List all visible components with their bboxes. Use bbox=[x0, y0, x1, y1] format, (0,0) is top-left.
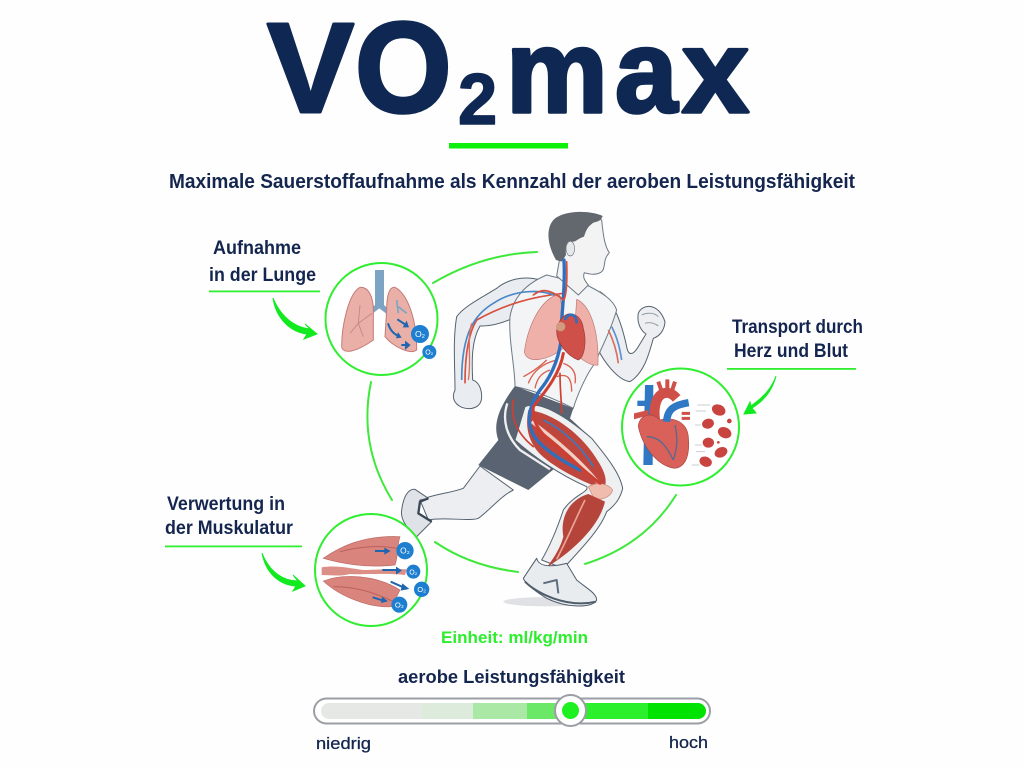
circle: heart bbox=[622, 368, 739, 486]
ground shadow bbox=[503, 597, 590, 606]
ear bbox=[566, 241, 575, 256]
title underline bbox=[449, 143, 568, 148]
scale high label: hoch bbox=[669, 733, 708, 752]
subtitle: Maximale Sauerstoffaufnahme als Kennzahl der aeroben Leistungsfähigkeit bbox=[169, 170, 855, 193]
scale heading: aerobe Leistungsfähigkeit bbox=[398, 667, 625, 687]
circle: lungs: O₂ bbox=[415, 329, 425, 339]
scale bar bbox=[314, 695, 710, 726]
title: 2 bbox=[458, 59, 497, 140]
title: V bbox=[267, 0, 354, 140]
label: muscle: Verwertung in bbox=[167, 494, 285, 515]
torso bbox=[510, 275, 617, 408]
label: lung: Aufnahme bbox=[213, 238, 301, 259]
arrow: muscle bbox=[262, 553, 305, 591]
circle: lungs bbox=[326, 263, 438, 375]
label: muscle: der Muskulatur bbox=[165, 518, 294, 539]
blood cells bbox=[698, 402, 733, 469]
head and neck bbox=[557, 217, 609, 295]
connecting arcs bbox=[367, 252, 676, 572]
title: a bbox=[615, 6, 678, 138]
flow arrows bbox=[388, 319, 409, 345]
title bbox=[267, 0, 749, 140]
calf muscles bbox=[547, 494, 605, 567]
heart body bbox=[638, 415, 689, 468]
rib vessels bbox=[523, 360, 575, 392]
circle: muscle bbox=[315, 514, 429, 626]
scale marker bbox=[555, 695, 586, 726]
lungs bbox=[524, 294, 563, 360]
label: heart bbox=[727, 317, 863, 370]
title: O bbox=[355, 0, 452, 139]
flow arrows bbox=[373, 551, 403, 601]
right lung bbox=[385, 287, 417, 351]
label: heart: Transport durch bbox=[732, 317, 863, 338]
unit label: Einheit: ml/kg/min bbox=[441, 628, 588, 647]
oxygen bubbles bbox=[411, 325, 429, 343]
runner figure bbox=[401, 212, 665, 606]
circle: muscle: O₂ bbox=[400, 546, 410, 556]
label: heart: Herz und Blut bbox=[734, 341, 849, 362]
front leg bbox=[515, 405, 623, 568]
thigh muscles bbox=[527, 410, 606, 489]
arrow: heart bbox=[744, 376, 776, 414]
hair bbox=[548, 212, 603, 262]
front arm bbox=[598, 292, 665, 382]
pulmonary artery bbox=[667, 403, 689, 422]
rear arm bbox=[453, 278, 540, 409]
shorts bbox=[478, 386, 592, 490]
front shoe bbox=[523, 558, 597, 606]
muscle bundles bbox=[323, 537, 400, 566]
oxygen bubbles bbox=[396, 542, 414, 559]
vena cava bbox=[643, 385, 653, 465]
aorta bbox=[655, 393, 677, 420]
title: x bbox=[682, 6, 749, 138]
label: muscle bbox=[165, 494, 302, 547]
left lung bbox=[342, 287, 373, 351]
circle: muscle: O₂ bbox=[417, 585, 426, 594]
circle: muscle: O₂ bbox=[395, 600, 404, 609]
arm blood vessels bbox=[462, 292, 622, 383]
label: lung: in der Lunge bbox=[209, 265, 316, 286]
circle: lungs: O₂ bbox=[425, 350, 434, 357]
back leg bbox=[401, 466, 513, 537]
arrow: lung bbox=[273, 298, 317, 339]
trachea bbox=[369, 270, 390, 314]
scale low label: niedrig bbox=[316, 734, 371, 753]
circle: muscle: O₂ bbox=[409, 569, 418, 576]
label: lung bbox=[209, 238, 320, 292]
heart bbox=[557, 314, 585, 360]
title: m bbox=[506, 5, 608, 137]
main vessels bbox=[512, 260, 600, 483]
